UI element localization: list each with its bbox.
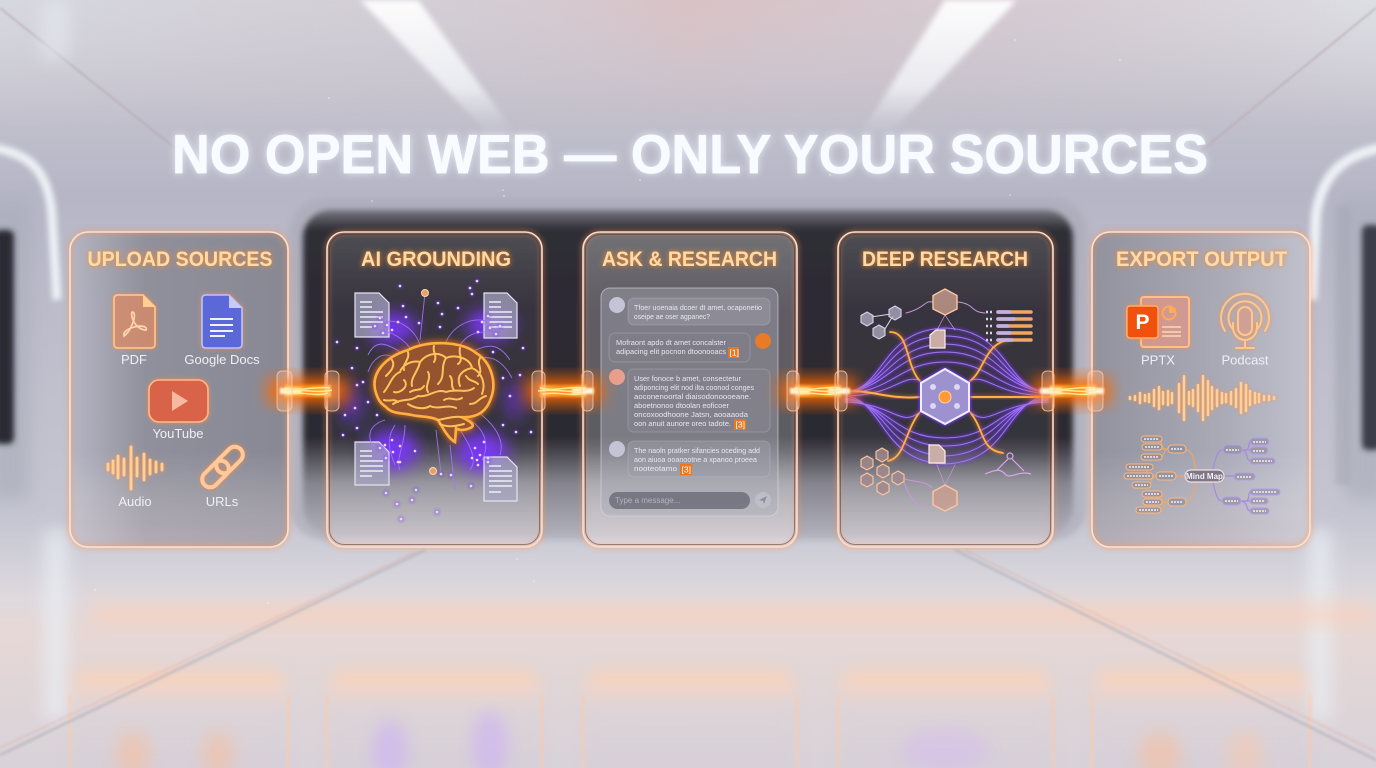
particles bbox=[95, 40, 1120, 603]
connector: deep research to export bbox=[1034, 371, 1110, 411]
icon: audio wave bbox=[108, 447, 162, 489]
flow lines bbox=[840, 302, 1050, 507]
mind map bbox=[1124, 436, 1280, 514]
source documents bbox=[355, 293, 517, 501]
message 1: Tfoer uoenaia dcoer dt amet, ocaponetio bbox=[634, 303, 762, 312]
central window bbox=[290, 198, 1087, 540]
message 3: User fonoce b amet, consectetur bbox=[634, 374, 741, 383]
mind map: Mind Map bbox=[1186, 472, 1223, 481]
floor seams bbox=[0, 550, 1376, 760]
message 3: aboetnonoo dtoolan eoficoer bbox=[634, 401, 729, 410]
floor reflections bbox=[72, 670, 1308, 768]
label: pdf: PDF bbox=[121, 352, 147, 367]
panel: upload sources bbox=[70, 232, 288, 547]
icon: google docs bbox=[202, 295, 242, 348]
message 3: aoconenoortal diaisodonoooeane. bbox=[634, 392, 751, 401]
hexagon nodes bbox=[933, 289, 957, 511]
document nodes bbox=[929, 330, 945, 463]
message 3 bbox=[609, 369, 770, 432]
panel: ai grounding bbox=[327, 232, 542, 547]
bar list bbox=[986, 312, 1031, 340]
message 2: [1] bbox=[730, 348, 739, 358]
heading: ask and research: ASK & RESEARCH bbox=[602, 248, 777, 271]
purple spark clusters bbox=[340, 310, 527, 472]
message input: Type a message... bbox=[615, 496, 680, 505]
heading: export output: EXPORT OUTPUT bbox=[1116, 248, 1287, 271]
message 4: aon aiuoa ooanootne a xpanoo proeea bbox=[634, 455, 758, 464]
connector: grounding to research bbox=[526, 371, 602, 411]
neural sparks bbox=[337, 281, 531, 519]
icon: pptx bbox=[1127, 297, 1189, 347]
icon: pdf bbox=[114, 295, 155, 348]
waveform bbox=[1130, 376, 1274, 420]
message 3: [3] bbox=[736, 420, 745, 430]
heading: ai grounding: AI GROUNDING bbox=[361, 248, 511, 271]
brain bbox=[375, 343, 493, 442]
message 2 bbox=[609, 333, 771, 362]
panel: export output bbox=[1092, 232, 1310, 547]
panel: deep research bbox=[838, 232, 1053, 547]
message 4: nooteotamo bbox=[634, 464, 677, 473]
title: NO OPEN WEB — ONLY YOUR SOURCES bbox=[172, 123, 1208, 185]
connector: research to deep research bbox=[780, 371, 856, 411]
connector: upload to grounding bbox=[268, 371, 348, 411]
message input bbox=[609, 492, 771, 509]
message 4: [3] bbox=[682, 464, 691, 474]
label: pptx: PPTX bbox=[1141, 352, 1175, 368]
message 3: oon anuit aunore oreo tadote. bbox=[634, 419, 731, 428]
label: urls: URLs bbox=[206, 494, 239, 509]
label: youtube: YouTube bbox=[152, 426, 204, 441]
message 3: oncoxoodhoone Jatsn, aooaaoda bbox=[634, 410, 749, 419]
heading: upload sources: UPLOAD SOURCES bbox=[88, 248, 272, 271]
message 1: oseipe ae oser agpanec? bbox=[634, 312, 710, 321]
center hub bbox=[921, 369, 969, 424]
chat window bbox=[601, 288, 778, 516]
label: podcast: Podcast bbox=[1222, 352, 1269, 368]
icon: podcast bbox=[1221, 294, 1269, 348]
small network glyph bbox=[985, 453, 1031, 476]
label: google docs: Google Docs bbox=[184, 352, 260, 367]
heading: deep research: DEEP RESEARCH bbox=[862, 248, 1028, 271]
icon: youtube bbox=[149, 380, 208, 422]
message 2: adipacing elit pocnon dtoonooacs bbox=[616, 347, 726, 356]
floor peach glow bbox=[90, 604, 1376, 624]
message 4 bbox=[609, 441, 770, 477]
label: audio: Audio bbox=[118, 494, 152, 509]
message 2: Mofraont apdo dt amet concalster bbox=[616, 338, 726, 347]
panel: ask and research bbox=[583, 232, 797, 547]
icon: pptx: P bbox=[1135, 311, 1150, 334]
icon: link bbox=[199, 443, 246, 491]
message 3: adiponcing elit nod ilta coonod conges bbox=[634, 383, 754, 392]
message 4: The naoln pratker sifancies oceding add bbox=[634, 446, 760, 455]
message 1 bbox=[609, 297, 770, 325]
